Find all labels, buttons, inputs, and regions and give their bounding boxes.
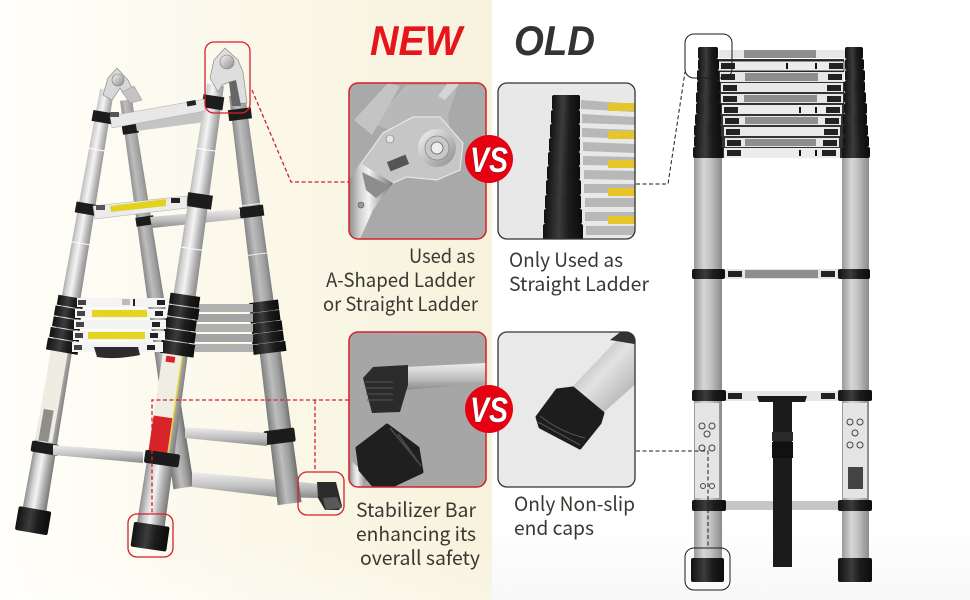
VS badge top: VS bbox=[470, 141, 508, 180]
panel: OLD ladder close-up bbox=[498, 83, 635, 240]
left collar stack bbox=[693, 47, 723, 158]
caption: used as A-shaped: or Straight Ladder bbox=[323, 288, 478, 317]
front right leg bbox=[130, 82, 234, 552]
right warning sticker bbox=[843, 403, 867, 498]
caption: non-slip end caps: end caps bbox=[514, 512, 594, 541]
black callout: top collar bbox=[636, 34, 732, 184]
right leg tube bbox=[842, 158, 869, 560]
red callout: foot and stabilizer bbox=[128, 400, 349, 557]
caption: stabilizer bar: Stabilizer Bar bbox=[356, 494, 476, 523]
back rungs bbox=[135, 108, 267, 446]
top rung bbox=[110, 99, 205, 128]
panel: NEW stabilizer close-up bbox=[349, 332, 486, 490]
head hinges bbox=[103, 48, 247, 106]
caption: stabilizer bar: overall safety bbox=[360, 542, 480, 571]
panel: OLD end cap close-up bbox=[498, 330, 640, 487]
rung strips bbox=[581, 100, 635, 235]
A-frame ladder illustration bbox=[15, 48, 342, 552]
back left leg bbox=[116, 98, 194, 489]
VS badge bottom bbox=[465, 385, 513, 433]
top rungs bbox=[715, 50, 845, 158]
caption: used as A-shaped: A-Shaped Ladder bbox=[326, 264, 475, 293]
bottom rung bbox=[692, 500, 872, 511]
caption: non-slip end caps bbox=[514, 488, 635, 541]
panel: NEW hinge close-up bbox=[349, 83, 486, 239]
lower rung bbox=[53, 445, 143, 463]
heading: OLD: OLD bbox=[514, 17, 595, 64]
folded rung stack bbox=[72, 298, 168, 352]
heading: NEW: NEW bbox=[370, 17, 465, 64]
end caps bbox=[691, 558, 872, 582]
VS badge bottom: VS bbox=[470, 391, 508, 430]
caption: only straight bbox=[509, 244, 649, 297]
handle bbox=[94, 347, 140, 358]
caption: only straight: Only Used as bbox=[509, 244, 623, 273]
left warning sticker bbox=[695, 403, 719, 498]
middle rung bbox=[692, 269, 870, 279]
front left leg bbox=[15, 87, 124, 535]
caption: stabilizer bar bbox=[356, 494, 480, 571]
stabilizer bar and foot bbox=[192, 472, 342, 510]
VS badge top bbox=[465, 135, 513, 183]
left leg tube bbox=[694, 158, 722, 560]
caption: used as A-shaped: Used as bbox=[409, 240, 475, 269]
caption: non-slip end caps: Only Non-slip bbox=[514, 488, 635, 517]
caption: stabilizer bar: enhancing its bbox=[356, 518, 476, 547]
caption: used as A-shaped bbox=[323, 240, 478, 317]
back right leg bbox=[221, 93, 306, 506]
lower rung with strap bbox=[692, 390, 872, 401]
red callout: hinge bbox=[205, 42, 349, 182]
black callout: end cap bbox=[636, 451, 730, 590]
telescopic ladder illustration bbox=[691, 47, 872, 582]
second rung with yellow label bbox=[93, 196, 187, 219]
strap and buckle bbox=[757, 396, 807, 567]
right collar stack bbox=[842, 47, 870, 158]
caption: only straight: Straight Ladder bbox=[509, 268, 649, 297]
